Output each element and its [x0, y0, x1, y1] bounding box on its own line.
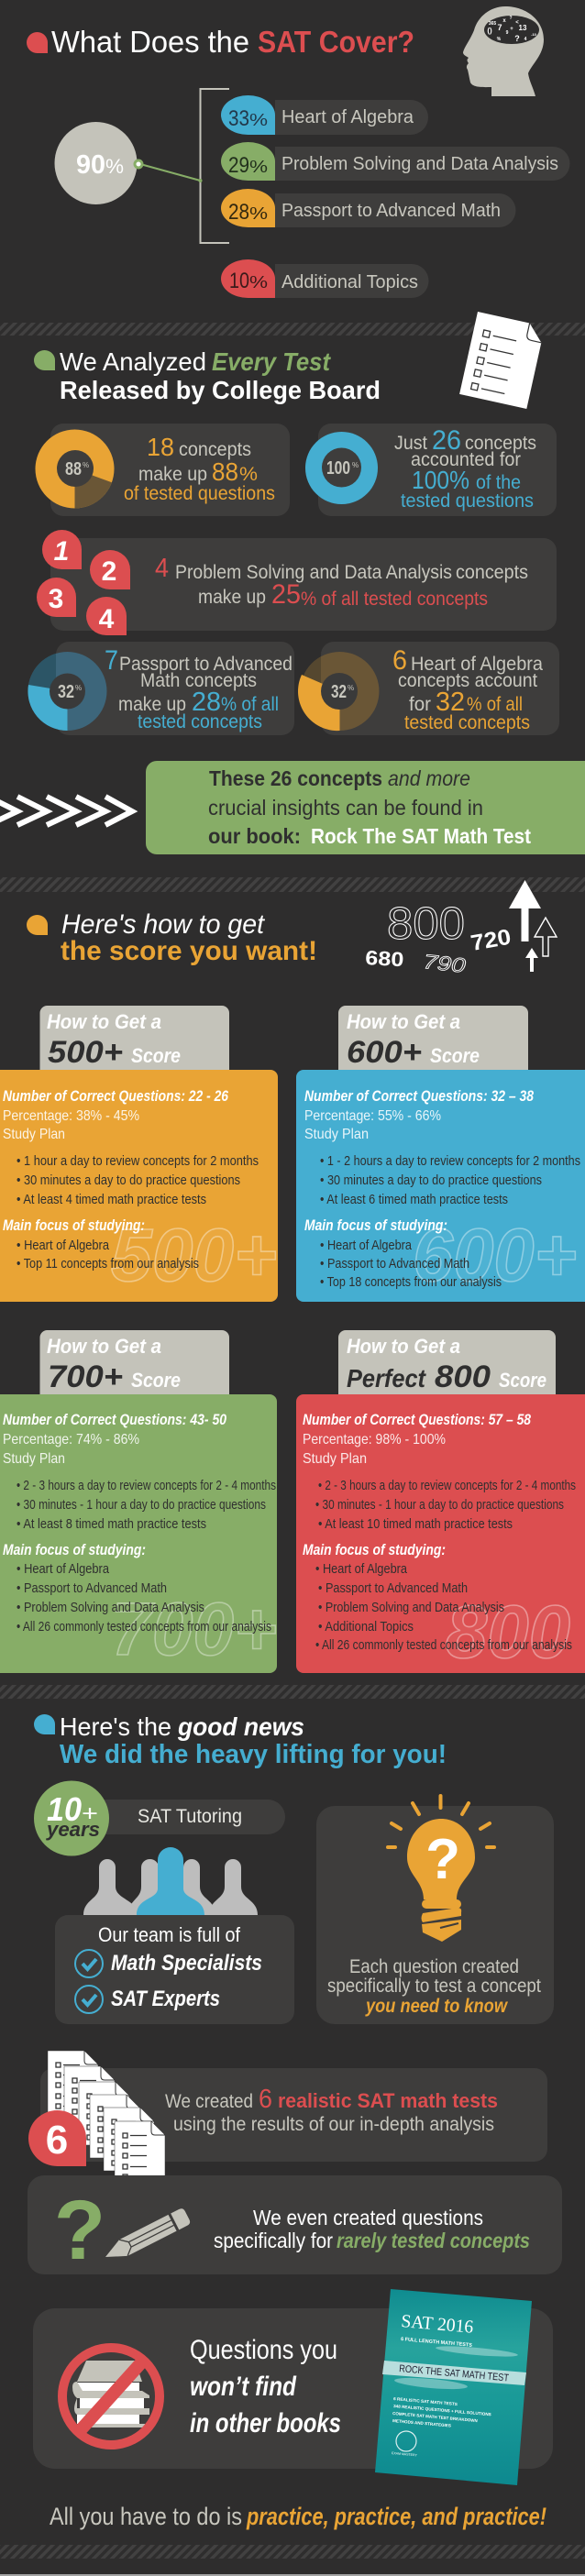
callout: these 26 concepts: These 26 concepts — [209, 766, 382, 790]
panel: heart of algebra — [298, 642, 559, 735]
icon: drop 6: 6 — [46, 2118, 68, 2163]
text: we created 6 tests: 6 — [259, 2085, 272, 2114]
text: 4 concepts make up 25%: concepts — [456, 562, 528, 583]
text: just 26 concepts: 100% — [412, 466, 469, 494]
book cover: COMPLETE SAT MATH TEST BREAKDOWN — [392, 2411, 478, 2423]
connector to bracket — [135, 89, 229, 243]
card body: • 2 - 3 hours a day to review concepts for 2 - 4 months — [17, 1478, 276, 1493]
text: we even created questions: rarely tested concepts — [337, 2229, 530, 2252]
tab: how to get a 500+: Score — [131, 1044, 181, 1067]
panel: team: Math Specialists — [111, 1951, 262, 1976]
text: 7 passport concepts: make up — [118, 694, 186, 715]
row: Passport to Advanced Math 28%: 28 — [228, 200, 249, 225]
card body: Number of Correct Questions: 32 – 38 — [304, 1087, 534, 1105]
text: questions you won't find in other books: in other books — [190, 2408, 341, 2438]
panel: 4 problem solving concepts — [37, 530, 557, 635]
footer line: All you have to do is — [50, 2503, 242, 2530]
text: 6 heart of algebra concepts — [392, 645, 543, 733]
card body — [296, 1394, 585, 1674]
row: Heart of Algebra 33%: 33 — [228, 106, 249, 131]
row: Heart of Algebra 33%: % — [249, 111, 268, 129]
card body: • Heart of Algebra — [17, 1561, 110, 1577]
chart: 90% circle: % — [105, 155, 124, 178]
text: we created 6 tests — [165, 2085, 498, 2135]
text: 18 concepts make up 88%: 88 — [212, 457, 238, 486]
card body: • Additional Topics — [318, 1619, 414, 1635]
text: just 26 concepts: Just — [394, 433, 427, 454]
heading: We Analyzed — [60, 347, 206, 376]
donut chart: 88%: 88 — [65, 459, 82, 479]
panel: 18 concepts 88% — [35, 424, 290, 516]
row: Passport to Advanced Math 28%: Passport to Advanced Math — [281, 201, 501, 221]
heading: Here's how to get — [61, 909, 266, 940]
text: questions you won't find in other books: won’t find — [190, 2372, 297, 2402]
icon: check math specialists — [75, 1950, 103, 1977]
book cover: 6 REALISTIC SAT MATH TESTS — [393, 2396, 458, 2406]
text: 18 concepts make up 88% — [124, 433, 275, 504]
text: 18 concepts make up 88%: concepts — [179, 439, 251, 460]
text: 6 heart of algebra concepts: for — [409, 694, 431, 715]
icon: head with math symbols: ? — [514, 34, 520, 43]
row: Problem Solving and Data Analysis 29%: 29 — [228, 153, 249, 178]
row: Additional Topics 10%: 10 — [229, 269, 249, 293]
card body: Study Plan — [3, 1127, 65, 1142]
section: what does the SAT cover — [27, 6, 570, 298]
card body: 600+ — [413, 1214, 577, 1297]
row: Additional Topics 10%: Additional Topics — [281, 272, 418, 292]
chart: 90% circle: 90 — [76, 150, 105, 180]
icon: head with math symbols: 13 — [519, 24, 527, 32]
section: here's how to get the score you want — [27, 880, 557, 977]
text: 4 concepts make up 25%: 4 — [155, 554, 169, 583]
card body: • At least 4 timed math practice tests — [17, 1192, 206, 1207]
text: just 26 concepts: 26 — [432, 425, 461, 456]
card body: Main focus of studying: — [304, 1216, 447, 1234]
card body: Number of Correct Questions: 43- 50 — [3, 1411, 226, 1428]
heading: Here's the — [60, 1712, 171, 1741]
section: we analyzed every test — [0, 312, 585, 854]
icon: head with math symbols: + — [510, 27, 513, 32]
text: 6 heart of algebra concepts: 32 — [436, 688, 465, 717]
heading: the score you want! — [61, 936, 317, 966]
icon: drop 3 — [37, 578, 76, 617]
card body: • All 26 commonly tested concepts from our analysis — [17, 1619, 271, 1635]
text: just 26 concepts: concepts — [465, 433, 536, 454]
panel: questions you won't find — [33, 2308, 553, 2469]
pill: SAT tutoring: SAT Tutoring — [138, 1806, 242, 1827]
icon: scores and up arrows — [365, 880, 557, 977]
card body: • 1 hour a day to review concepts for 2 months — [17, 1153, 259, 1169]
panel: team — [55, 1915, 294, 2024]
icon: head with math symbols: 4 — [524, 37, 527, 42]
donut chart: 32% orange: % — [348, 684, 354, 692]
icon: head with math symbols: ? — [509, 16, 513, 21]
tab: how to get a 500+: 500+ — [48, 1035, 123, 1070]
card body: • 30 minutes - 1 hour a day to do practice questions — [17, 1497, 266, 1513]
card body: Percentage: 98% - 100% — [303, 1432, 446, 1448]
card body — [0, 1070, 278, 1302]
icon: team silhouettes — [83, 1847, 258, 1915]
icon: head with math symbols: < — [515, 20, 519, 26]
heading — [34, 1712, 447, 1769]
card body — [296, 1070, 585, 1302]
arrows: chevrons — [0, 797, 132, 825]
tab: how to get a perfect 800: How to Get a — [347, 1335, 460, 1358]
text: 7 passport concepts: tested concepts — [138, 711, 262, 732]
panel: team: Our team is full of — [98, 1923, 241, 1946]
tab: how to get a perfect 800: Perfect — [347, 1364, 427, 1393]
icon: checklist document — [459, 312, 545, 409]
icon: head with math symbols: 9 — [506, 30, 509, 36]
card: 700+ score — [0, 1330, 277, 1673]
icon: drop 2: 2 — [102, 556, 116, 587]
pill: SAT tutoring — [101, 1800, 285, 1834]
row: Problem Solving and Data Analysis 29%: Problem Solving and Data Analysis — [281, 154, 558, 174]
card body: • Passport to Advanced Math — [17, 1580, 167, 1596]
text: 6 heart of algebra concepts: tested concepts — [404, 712, 530, 733]
card body: Main focus of studying: — [3, 1541, 146, 1558]
donut chart: 32% blue — [28, 652, 106, 731]
card body: Percentage: 38% - 45% — [3, 1108, 139, 1124]
icon: drop 1 — [42, 530, 82, 569]
panel: 26 concepts 100% — [305, 424, 557, 516]
donut chart: 32% orange — [298, 652, 380, 731]
icon: head with math symbols — [463, 6, 544, 96]
text: questions you won't find in other books — [190, 2335, 341, 2438]
title — [27, 25, 414, 59]
icon: scores and up arrows: 790 — [422, 950, 468, 977]
card: 500+ score — [0, 1006, 278, 1302]
icon: scores and up arrows: 720 — [469, 925, 513, 956]
card body: Main focus of studying: — [303, 1541, 446, 1558]
panel: team: SAT Experts — [111, 1987, 220, 2011]
icon: light bulb: ? — [425, 1828, 460, 1891]
tab: how to get a 700+ — [40, 1330, 229, 1394]
text: 6 heart of algebra concepts: 6 — [392, 645, 407, 676]
card body: Study Plan — [303, 1451, 367, 1467]
text: just 26 concepts — [394, 425, 536, 512]
card body: • 30 minutes a day to do practice questions — [320, 1172, 542, 1188]
row: Additional Topics 10% — [221, 259, 429, 298]
tab: how to get a 600+: 600+ — [347, 1035, 422, 1070]
card body: • Passport to Advanced Math — [318, 1580, 468, 1596]
text: we created 6 tests: realistic SAT math tests — [278, 2089, 498, 2112]
book cover: ROCK THE SAT MATH TEST — [399, 2363, 510, 2383]
text: 6 heart of algebra concepts: % of all — [467, 694, 523, 715]
icon: drop 1: 1 — [54, 536, 69, 567]
tab: how to get a perfect 800: 800 — [435, 1360, 491, 1394]
text: 7 passport concepts: 7 — [105, 645, 118, 676]
card body: Percentage: 55% - 66% — [304, 1108, 441, 1124]
icon: light bulb — [388, 1796, 494, 1942]
text: 7 passport concepts: Math concepts — [140, 670, 257, 691]
heading — [27, 909, 317, 966]
card body: • Passport to Advanced Math — [320, 1256, 469, 1271]
icon: head with math symbols: % — [497, 37, 502, 42]
card body: • Heart of Algebra — [320, 1238, 413, 1253]
tab: how to get a perfect 800: Score — [499, 1369, 546, 1392]
text: each question created — [327, 1956, 541, 2017]
row: Additional Topics 10%: % — [249, 273, 268, 292]
card body: Number of Correct Questions: 57 – 58 — [303, 1411, 531, 1428]
card: 600+ score — [296, 1006, 585, 1302]
icon: drop 2 — [90, 550, 130, 589]
panel: each question — [316, 1796, 554, 2024]
callout: these 26 concepts: Rock The SAT Math Test — [311, 824, 531, 848]
text: 4 concepts make up 25%: % of all tested concepts — [301, 589, 488, 610]
donut chart: 88%: % — [83, 461, 89, 469]
callout: these 26 concepts: crucial insights can be found in — [208, 796, 483, 820]
book cover — [375, 2289, 532, 2485]
text: we even created questions — [214, 2206, 530, 2252]
panel: rarely tested concepts — [28, 2175, 562, 2277]
text: 7 passport concepts: 28 — [192, 688, 221, 717]
book cover: 348 REALISTIC QUESTIONS + FULL SOLUTIONS — [393, 2404, 491, 2416]
text: we created 6 tests: We created — [165, 2091, 253, 2112]
card body: Number of Correct Questions: 22 - 26 — [3, 1087, 228, 1105]
icon: head with math symbols: x — [502, 18, 506, 24]
donut chart: 100% — [305, 432, 378, 504]
icon: green question mark: ? — [54, 2184, 105, 2277]
card body: 800 — [446, 1591, 570, 1674]
text: 18 concepts make up 88%: 18 — [147, 433, 174, 461]
text: 18 concepts make up 88%: % — [239, 464, 258, 485]
row: Passport to Advanced Math 28%: % — [249, 204, 268, 223]
icon: head with math symbols: 365 — [489, 21, 496, 27]
tab: how to get a 500+ — [40, 1006, 229, 1070]
panel: 6 realistic tests — [40, 2068, 547, 2162]
row: Passport to Advanced Math 28% — [221, 189, 515, 227]
card body: Percentage: 74% - 86% — [3, 1432, 139, 1448]
icon: drop 6 — [28, 2110, 86, 2166]
card: perfect 800 score — [296, 1330, 585, 1674]
heading — [34, 347, 381, 404]
text: just 26 concepts: of the — [476, 472, 521, 493]
icon: stack of six tests — [28, 2051, 165, 2185]
heading: good news — [177, 1712, 304, 1741]
card body: 700+ — [111, 1588, 277, 1671]
title: What Does the — [51, 25, 249, 59]
text: 4 concepts make up 25%: 25 — [271, 579, 301, 610]
row: Heart of Algebra 33% — [221, 95, 428, 135]
text: each question created: specifically to test a concept — [327, 1976, 541, 1997]
donut chart: 32% blue: 32 — [58, 682, 74, 702]
card body: • At least 6 timed math practice tests — [320, 1192, 508, 1207]
text: each question created: Each question created — [349, 1956, 519, 1977]
text: we even created questions: specifically for — [214, 2229, 333, 2252]
text: 7 passport concepts: Passport to Advanced — [119, 654, 292, 675]
row: Problem Solving and Data Analysis 29% — [221, 142, 570, 181]
section: the good news — [28, 1712, 562, 2530]
donut chart: 32% orange: 32 — [331, 682, 347, 702]
icon: head with math symbols: -10 — [531, 32, 537, 37]
card body: • Heart of Algebra — [17, 1238, 110, 1253]
row: Heart of Algebra 33%: Heart of Algebra — [281, 107, 414, 127]
icon: drop 4 — [86, 597, 127, 635]
text: 4 concepts make up 25%: make up — [198, 587, 266, 608]
icon: check SAT experts — [75, 1986, 103, 2013]
card body: • Top 18 concepts from our analysis — [320, 1274, 502, 1290]
book cover: 6 FULL LENGTH MATH TESTS — [401, 2337, 472, 2349]
callout: these 26 concepts: our book: — [208, 824, 301, 848]
badge: 10+ years: years — [46, 1818, 100, 1841]
text: 4 concepts make up 25%: Problem Solving and Data Analysis — [175, 562, 452, 583]
card body: 500+ — [111, 1214, 277, 1297]
card body: • Problem Solving and Data Analysis — [17, 1600, 204, 1615]
callout: these 26 concepts: and more — [388, 766, 470, 790]
text: 4 concepts make up 25% — [155, 554, 528, 610]
icon: drop 4: 4 — [99, 604, 115, 634]
callout: these 26 concepts — [146, 761, 585, 854]
card body — [0, 1394, 277, 1673]
donut chart: 32% blue: % — [75, 684, 82, 692]
title: SAT Cover? — [258, 25, 414, 59]
book cover: SAT 2016 — [401, 2311, 474, 2338]
text: just 26 concepts: accounted for — [411, 449, 521, 470]
icon: head with math symbols: () — [487, 27, 492, 35]
chart: 90% circle — [55, 122, 138, 204]
icon: pencil — [101, 2207, 192, 2265]
book cover: METHODS AND STRATEGIES — [392, 2418, 451, 2428]
heading: We did the heavy lifting for you! — [60, 1740, 447, 1769]
tab: how to get a perfect 800 — [338, 1330, 556, 1394]
icon: head with math symbols: 7 — [497, 23, 502, 32]
footer line — [50, 2503, 546, 2530]
tab: how to get a 600+: How to Get a — [347, 1010, 460, 1033]
card body: • At least 10 timed math practice tests — [318, 1516, 513, 1532]
badge: 10+ years: + — [82, 1801, 98, 1826]
card body: • Heart of Algebra — [315, 1561, 408, 1577]
text: we created 6 tests: using the results of our in-depth analysis — [173, 2114, 494, 2135]
donut chart: 100%: % — [352, 461, 359, 469]
icon: scores and up arrows: 800 — [387, 899, 465, 949]
card body: • At least 8 timed math practice tests — [17, 1516, 206, 1532]
heading: Every Test — [212, 347, 332, 376]
panel: passport to advanced math — [28, 642, 294, 735]
donut chart: 100%: 100 — [326, 458, 350, 479]
text: each question created: you need to know — [365, 1996, 508, 2017]
text: 18 concepts make up 88%: make up — [138, 464, 207, 485]
badge: 10+ years — [34, 1780, 109, 1855]
icon: scores and up arrows: 680 — [365, 946, 404, 971]
text: 6 heart of algebra concepts: concepts account — [398, 670, 537, 691]
text: we even created questions: We even created questions — [253, 2206, 483, 2229]
card body: • Top 11 concepts from our analysis — [17, 1256, 199, 1271]
donut chart: 88% — [35, 429, 114, 508]
tab: how to get a 600+ — [338, 1006, 528, 1070]
text: 18 concepts make up 88%: of tested questions — [124, 483, 275, 504]
text: 6 heart of algebra concepts: Heart of Algebra — [411, 654, 543, 675]
icon: no books — [62, 2348, 160, 2445]
card body: Main focus of studying: — [3, 1216, 145, 1234]
book cover: EXAM MASTERY — [392, 2451, 418, 2457]
heading: Released by College Board — [60, 376, 381, 404]
tab: how to get a 500+: How to Get a — [47, 1010, 161, 1033]
card body: Study Plan — [3, 1451, 65, 1467]
card body: Study Plan — [304, 1127, 369, 1142]
text: 7 passport concepts: % of all — [221, 694, 279, 715]
text: questions you won't find in other books: Questions you — [190, 2335, 337, 2365]
badge: 10+ years: 10 — [47, 1790, 82, 1828]
tab: how to get a 700+: Score — [131, 1369, 181, 1392]
text: just 26 concepts: tested questions — [401, 490, 534, 512]
tab: how to get a 700+: 700+ — [48, 1360, 123, 1394]
row: Problem Solving and Data Analysis 29%: % — [249, 158, 268, 176]
card body: • 30 minutes a day to do practice questions — [17, 1172, 240, 1188]
icon: drop 3: 3 — [49, 584, 63, 614]
tab: how to get a 600+: Score — [430, 1044, 480, 1067]
tab: how to get a 700+: How to Get a — [47, 1335, 161, 1358]
text: 7 passport concepts — [105, 645, 292, 732]
card body: • Problem Solving and Data Analysis — [318, 1600, 504, 1615]
